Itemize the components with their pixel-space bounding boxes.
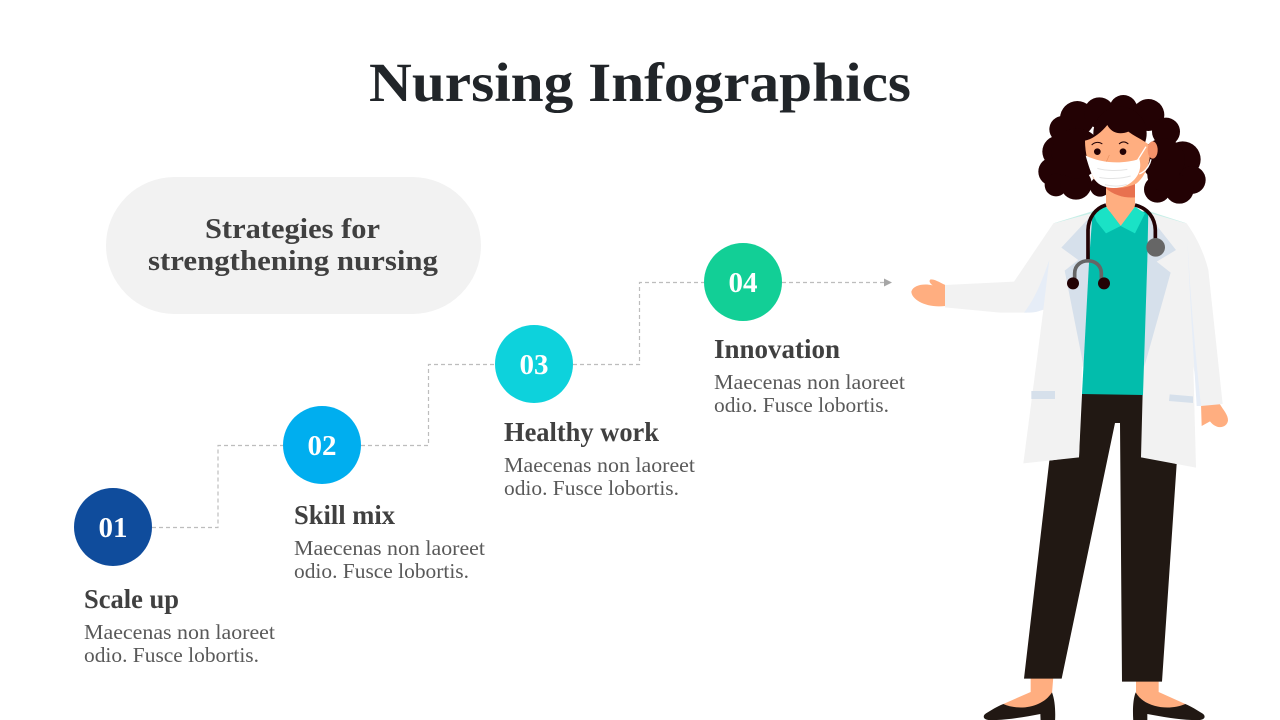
step 01: scale up: Maecenas non laoreet: [84, 620, 275, 644]
step 01: scale up: odio. Fusce lobortis.: [84, 643, 259, 667]
legs and shoes: [984, 394, 1205, 720]
step 04: innovation: odio. Fusce lobortis.: [714, 393, 889, 417]
head, hair and stethoscope: [1038, 95, 1206, 289]
arrow: connector 03 to 04: [573, 282, 704, 364]
step 03: healthy work: [495, 325, 695, 500]
illustration: nurse: [911, 95, 1228, 720]
panel: strategies pill: Strategies for: [205, 213, 380, 245]
step 04: innovation: [704, 243, 905, 417]
step 02: skill mix: Maecenas non laoreet: [294, 536, 485, 560]
step 01: scale up: Scale up: [84, 584, 179, 614]
panel: strategies pill: [106, 177, 481, 314]
step 04: innovation: Maecenas non laoreet: [714, 370, 905, 394]
step 02: skill mix: [283, 406, 485, 583]
torso, coat and hands: [911, 211, 1228, 468]
step 01: scale up: [74, 488, 275, 667]
step 03: healthy work: 03: [520, 349, 548, 381]
step 02: skill mix: odio. Fusce lobortis.: [294, 559, 469, 583]
step 03: healthy work: Healthy work: [504, 417, 659, 447]
arrow: connector 04 to nurse: [782, 278, 892, 286]
step 04: innovation: 04: [728, 267, 758, 299]
step 03: healthy work: Maecenas non laoreet: [504, 453, 695, 477]
arrow: connector 01 to 02: [152, 446, 283, 528]
step 01: scale up: 01: [98, 512, 128, 544]
panel: strategies pill: strengthening nursing: [148, 245, 439, 277]
arrow: connector 02 to 03: [361, 364, 495, 446]
step 02: skill mix: Skill mix: [294, 500, 395, 530]
step 02: skill mix: 02: [308, 430, 336, 462]
title: Nursing Infographics: [369, 52, 911, 113]
step 04: innovation: Innovation: [714, 334, 840, 364]
step 03: healthy work: odio. Fusce lobortis.: [504, 476, 679, 500]
